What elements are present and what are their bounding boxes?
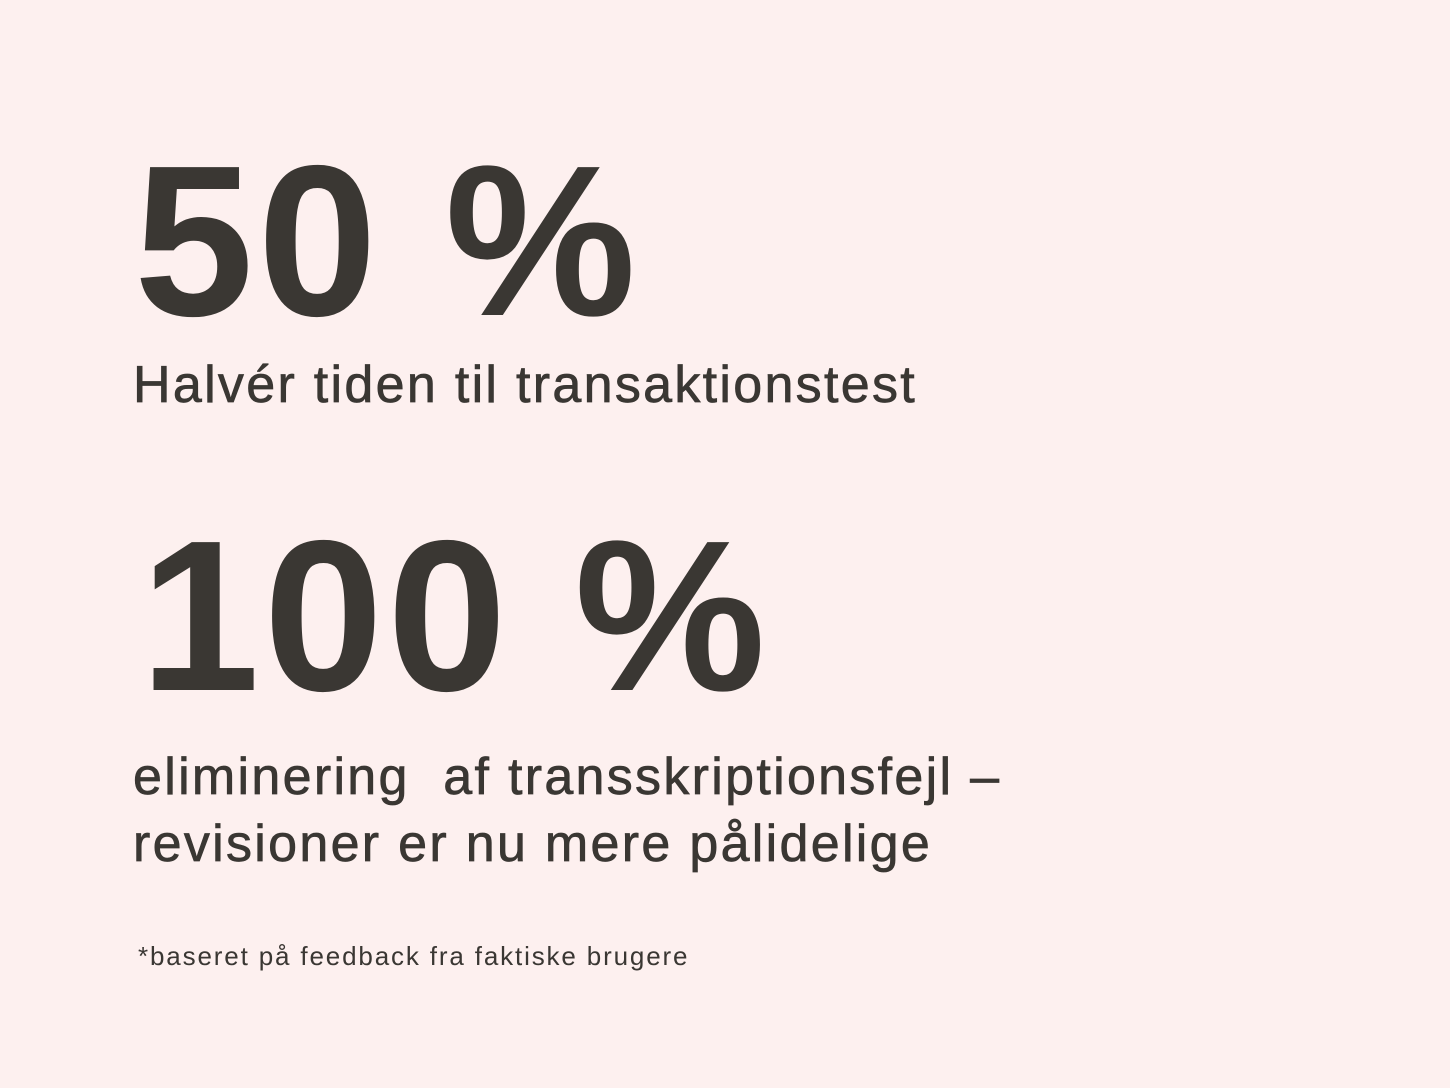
stat: 50 %: 50 % [134, 120, 640, 361]
caption: 100 %: revisioner er nu mere pålidelige [133, 815, 932, 873]
footnote: *baseret på feedback fra faktiske brugere [138, 941, 689, 971]
caption: 100 % [133, 748, 1001, 873]
caption: 100 %: eliminering af transskriptionsfejl – [133, 748, 1001, 806]
caption: 50 %: Halvér tiden til transaktionstest [133, 356, 917, 414]
stat: 100 %: 100 % [140, 495, 770, 736]
